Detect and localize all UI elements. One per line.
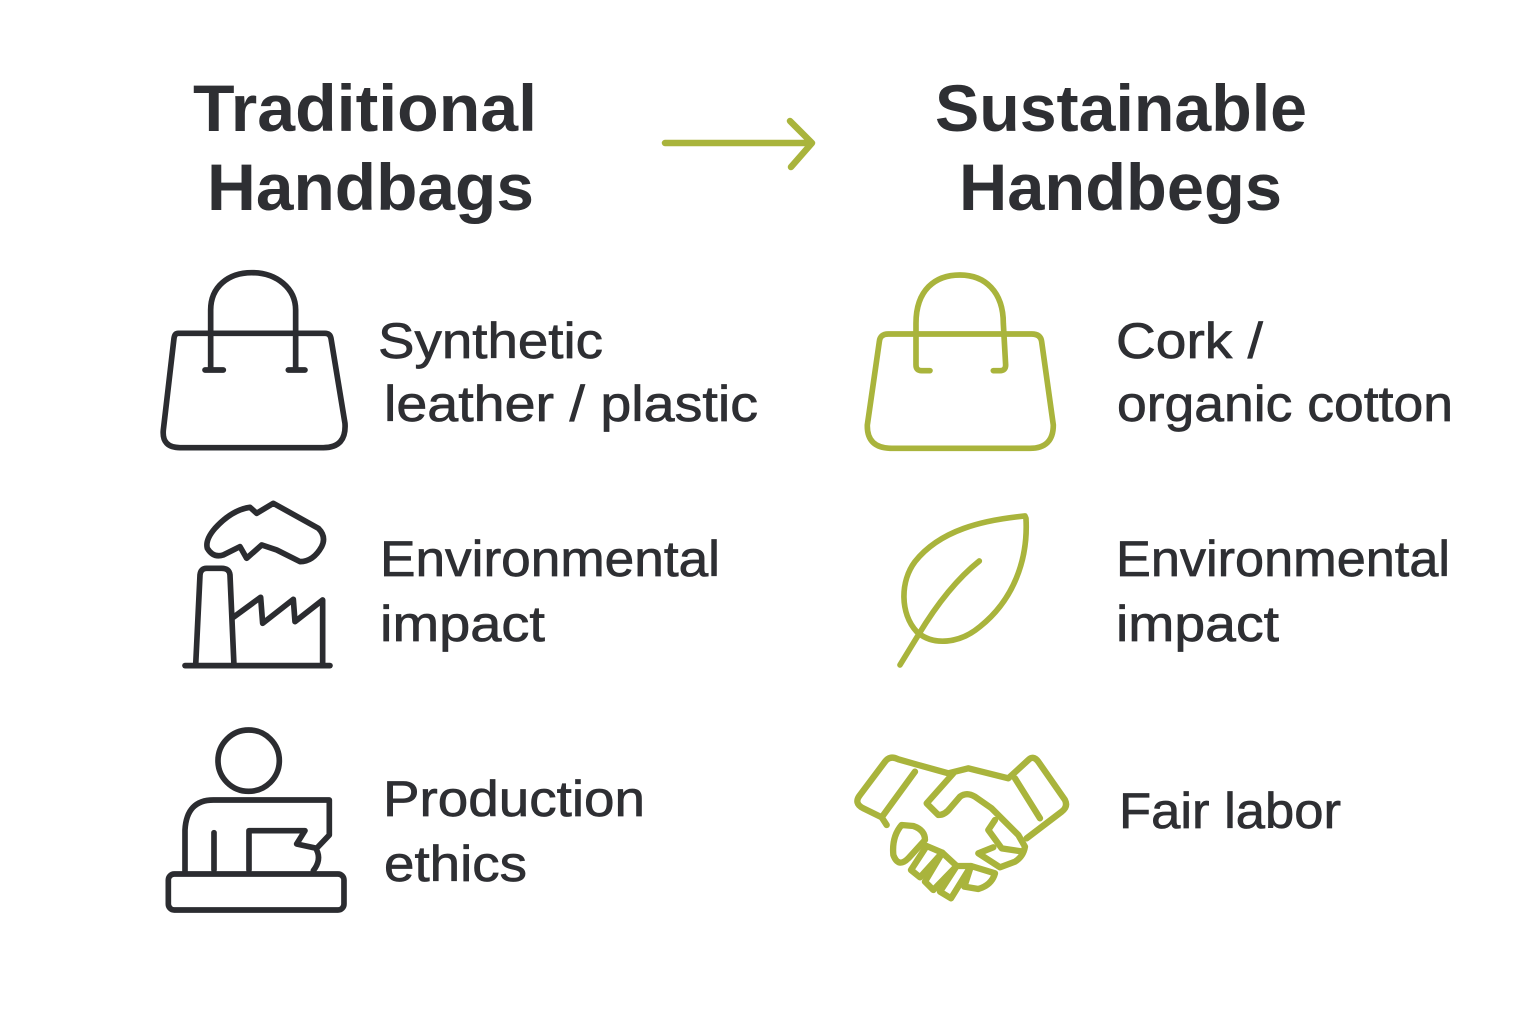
heading: Traditional Handbags (193, 71, 537, 224)
icon: factory and smoke (185, 503, 330, 666)
arrow (665, 121, 812, 167)
text: Synthetic leather / plastic: leather / plastic (384, 376, 758, 432)
text: Production ethics: Production (383, 771, 645, 827)
text: Environmental impact (traditional) (380, 531, 720, 652)
heading: Sustainable Handbegs: Sustainable (935, 71, 1307, 145)
text: Environmental impact (traditional): Environmental (380, 531, 720, 587)
text: Environmental impact (traditional): impact (380, 596, 545, 652)
text: Cork / organic cotton: Cork / (1116, 313, 1263, 369)
heading: Sustainable Handbegs: Handbegs (959, 150, 1282, 224)
text: Cork / organic cotton: organic cotton (1117, 376, 1453, 432)
icon: traditional handbag (163, 273, 345, 448)
heading: Sustainable Handbegs (935, 71, 1307, 224)
icon: sustainable handbag (867, 275, 1053, 448)
icon: leaf (900, 516, 1026, 665)
text: Synthetic leather / plastic (378, 313, 758, 432)
text: Synthetic leather / plastic: Synthetic (378, 313, 603, 369)
text: Production ethics (383, 771, 645, 892)
text: Environmental impact (sustainable): impact (1116, 596, 1279, 652)
icon: worker at desk (168, 730, 344, 910)
text: Production ethics: ethics (384, 836, 527, 892)
text: Cork / organic cotton (1116, 313, 1453, 432)
icon: handshake (857, 758, 1066, 898)
heading: Traditional Handbags: Traditional (193, 71, 537, 145)
text: Environmental impact (sustainable): Environmental (1116, 531, 1450, 587)
heading: Traditional Handbags: Handbags (207, 150, 534, 224)
text: Fair labor: Fair labor (1119, 783, 1341, 839)
text: Environmental impact (sustainable) (1116, 531, 1450, 652)
